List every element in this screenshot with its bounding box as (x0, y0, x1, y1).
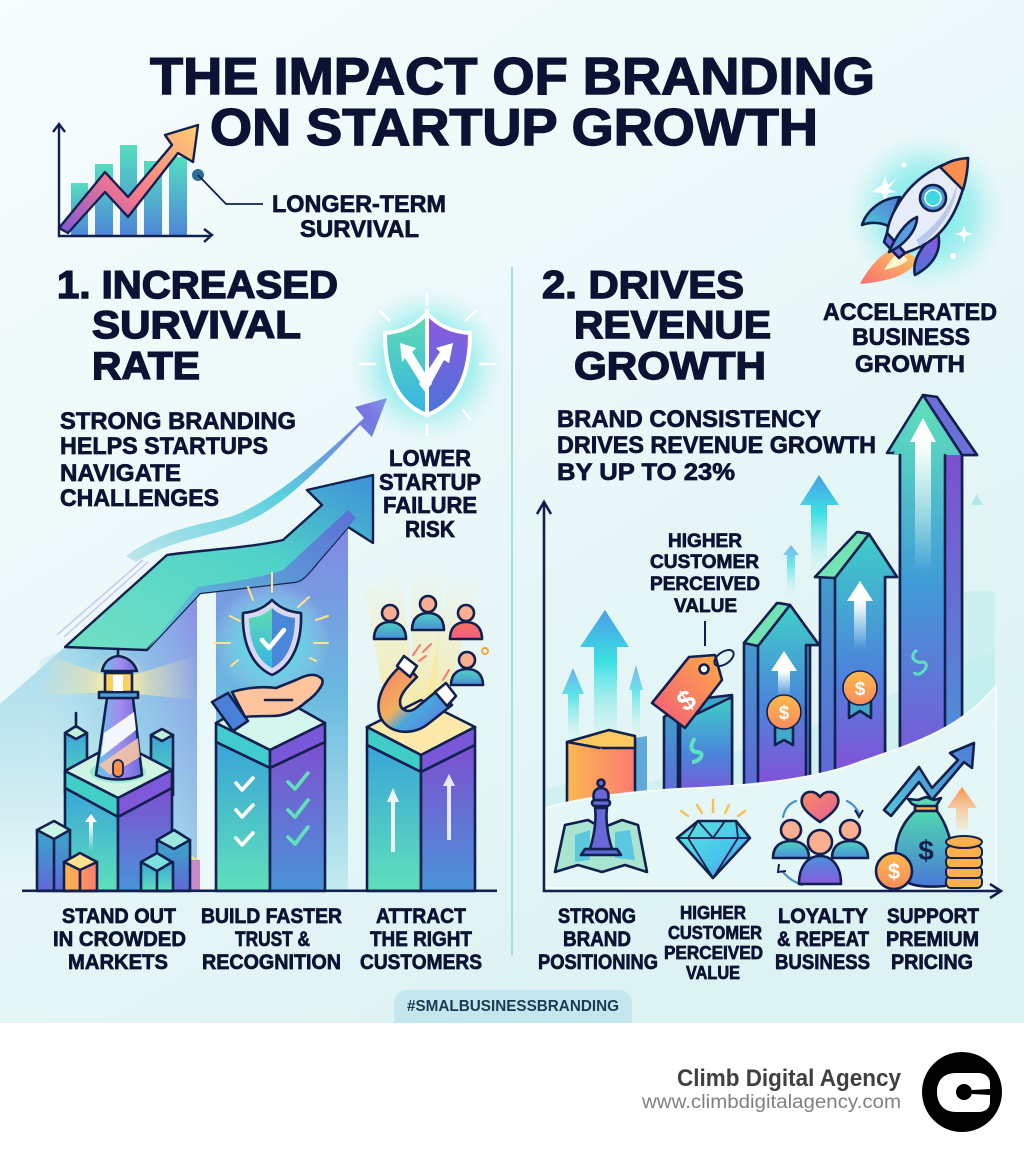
label: lower startup failure risk: LOWER (389, 445, 471, 471)
footer brand text: Climb Digital Agency (677, 1065, 902, 1092)
text: strong branding: CHALLENGES (60, 485, 219, 512)
column: attract customers (365, 568, 488, 891)
label: accelerated business growth: BUSINESS (852, 324, 970, 351)
bar 3: $ (779, 703, 790, 724)
caption: strong brand positioning (538, 905, 658, 974)
column: trust and hand (212, 573, 330, 891)
text: strong branding (60, 408, 296, 512)
caption: higher customer perceived value: VALUE (686, 963, 740, 983)
icon: map and chess piece (555, 780, 647, 872)
text: strong branding: HELPS STARTUPS (60, 433, 268, 460)
title: THE IMPACT OF BRANDING (150, 48, 875, 106)
heading: increased survival rate: SURVIVAL (92, 304, 301, 347)
hashtag pill: #SMALBUSINESSBRANDING (407, 998, 619, 1015)
title: ON STARTUP GROWTH (210, 99, 818, 157)
icon: money bag, coins and trend: $ (918, 835, 934, 866)
caption: build trust: BUILD FASTER (201, 905, 342, 928)
heading: increased survival rate: RATE (92, 345, 200, 388)
label: lower startup failure risk (379, 445, 481, 542)
bar 2 (664, 695, 732, 800)
text: strong branding: NAVIGATE (60, 460, 181, 487)
caption: attract customers: ATTRACT (376, 905, 466, 928)
label: higher customer perceived value: HIGHER (668, 531, 742, 552)
caption: higher customer perceived value: HIGHER (680, 903, 746, 923)
text: brand consistency: DRIVES REVENUE GROWTH (557, 432, 876, 459)
caption: stand out (53, 905, 186, 974)
caption: support premium pricing: PRICING (891, 951, 973, 974)
heading: drives revenue growth: 2. DRIVES (542, 264, 744, 307)
background arrows (562, 475, 983, 740)
label: accelerated business growth: ACCELERATED (823, 299, 997, 326)
arrow: main ribbon (65, 475, 373, 650)
heading: drives revenue growth (542, 264, 771, 388)
bar 3 (744, 603, 819, 785)
icon: loyalty people and heart (773, 792, 868, 885)
divider (511, 267, 513, 955)
caption: loyalty and repeat business: & REPEAT (777, 928, 869, 951)
caption: build trust: RECOGNITION (202, 951, 341, 974)
icon: rocket (846, 132, 1006, 292)
icon: money bag, coins and trend: $ (888, 859, 900, 884)
caption: attract customers: CUSTOMERS (360, 951, 482, 974)
caption: stand out: MARKETS (68, 951, 168, 974)
label: higher customer perceived value (650, 531, 760, 646)
icon: growth chart (53, 124, 263, 242)
text: brand consistency (557, 406, 876, 486)
icon: glowing shield (349, 287, 505, 443)
footer brand text: www.climbdigitalagency.com (641, 1092, 901, 1113)
caption: build trust: TRUST & (235, 928, 310, 951)
footer band (0, 1023, 1024, 1154)
axis: left baseline (22, 890, 497, 892)
caption: loyalty and repeat business: LOYALTY (778, 905, 868, 928)
wave floor (546, 686, 996, 888)
heading: increased survival rate: 1. INCREASED (57, 264, 338, 307)
caption: build trust (201, 905, 342, 974)
text: brand consistency: BRAND CONSISTENCY (557, 406, 821, 433)
footer brand text (641, 1065, 902, 1113)
heading: increased survival rate (57, 264, 338, 388)
caption: attract customers (360, 905, 482, 974)
label: lower startup failure risk: FAILURE (383, 492, 477, 518)
small buildings (37, 821, 200, 891)
caption: higher customer perceived value: PERCEIVED (664, 943, 763, 963)
caption: attract customers: THE RIGHT (370, 928, 472, 951)
chart: survival growth backdrop (0, 530, 348, 891)
caption: stand out: IN CROWDED (53, 928, 186, 951)
label: lower startup failure risk: STARTUP (379, 469, 481, 495)
chart: revenue growth arrows (546, 395, 995, 815)
text: strong branding: STRONG BRANDING (60, 408, 296, 435)
caption: support premium pricing: SUPPORT (887, 905, 979, 928)
caption: strong brand positioning: STRONG (558, 905, 636, 928)
axes: right chart (537, 502, 1001, 898)
label: accelerated business growth (823, 299, 997, 378)
caption: loyalty and repeat business (775, 905, 870, 974)
icon: money bag, coins and trend (876, 743, 982, 889)
icon: price tag: $ (671, 683, 702, 718)
caption: higher customer perceived value (664, 903, 763, 983)
text: brand consistency: BY UP TO 23% (557, 459, 735, 486)
column: lighthouse (40, 649, 197, 891)
label: higher customer perceived value: VALUE (674, 596, 737, 617)
label: lower startup failure risk: RISK (405, 516, 455, 542)
label: longer-term survival (272, 191, 446, 243)
caption: strong brand positioning: POSITIONING (538, 951, 658, 974)
logo (922, 1052, 1002, 1132)
caption: higher customer perceived value: CUSTOMER (668, 923, 762, 943)
caption: strong brand positioning: BRAND (563, 928, 631, 951)
arrow: thin upward (126, 398, 387, 562)
label: longer-term survival: LONGER-TERM (272, 191, 446, 218)
icon: diamond (677, 800, 750, 878)
hashtag pill (394, 990, 632, 1034)
label: accelerated business growth: GROWTH (855, 351, 965, 378)
icon: price tag (652, 647, 736, 728)
label: higher customer perceived value: CUSTOMER (650, 552, 759, 573)
caption: loyalty and repeat business: BUSINESS (775, 951, 870, 974)
caption: stand out: STAND OUT (62, 905, 176, 928)
bar 4: $ (855, 679, 866, 700)
bar 5 (887, 395, 977, 760)
bar 4 (815, 532, 897, 775)
heading: drives revenue growth: GROWTH (574, 345, 766, 388)
label: higher customer perceived value: PERCEIVED (650, 574, 760, 595)
label: longer-term survival: SURVIVAL (300, 216, 419, 243)
caption: support premium pricing: PREMIUM (886, 928, 979, 951)
heading: drives revenue growth: REVENUE (574, 304, 771, 347)
title (150, 48, 875, 157)
caption: support premium pricing (886, 905, 979, 974)
bar 1: orange box (567, 730, 647, 815)
